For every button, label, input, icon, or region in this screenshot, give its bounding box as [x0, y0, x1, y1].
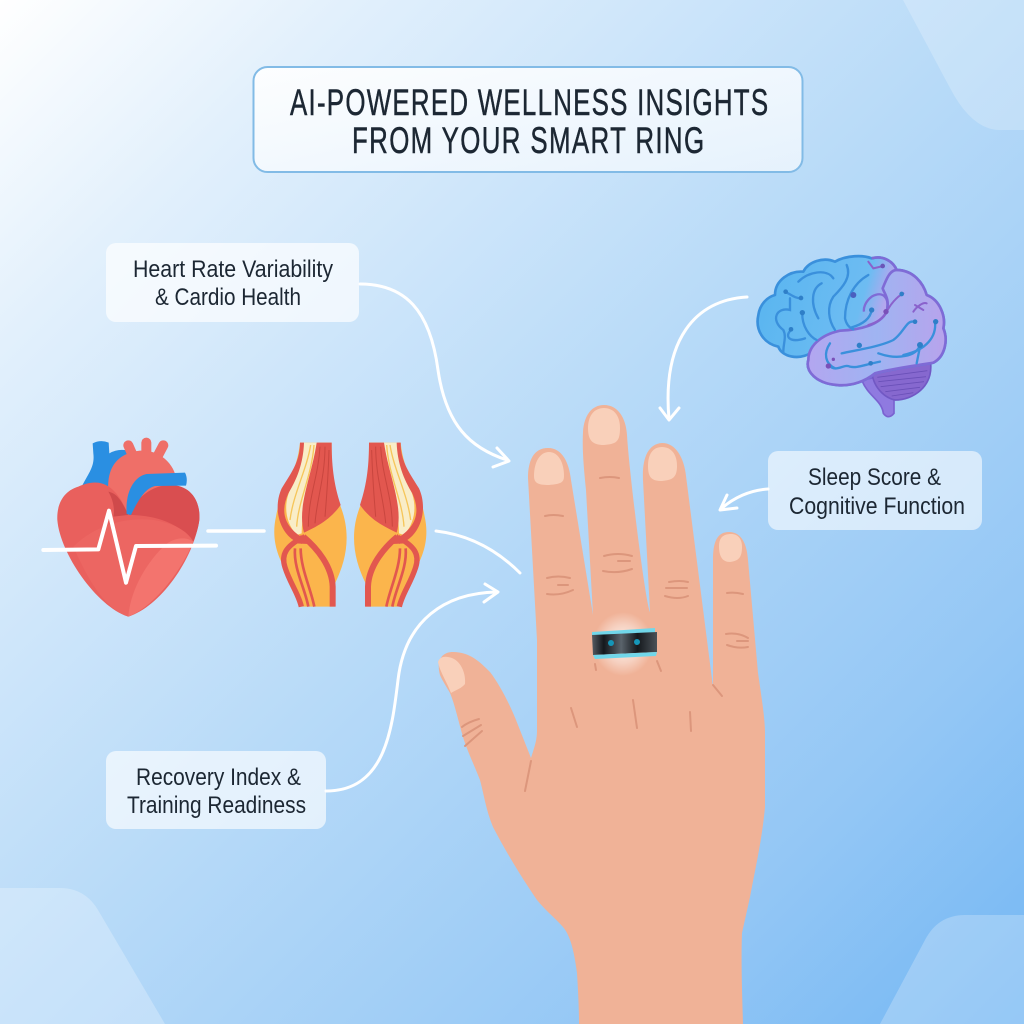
arrow: muscle to hand — [436, 531, 520, 573]
nail: little — [719, 534, 742, 562]
label: heart rate variability: Heart Rate Variability — [133, 256, 333, 283]
label: heart rate variability — [106, 243, 359, 322]
corner shape: top right — [903, 0, 1024, 130]
hand — [438, 405, 765, 1024]
smart ring — [592, 612, 657, 676]
connector: heart to muscle — [208, 529, 264, 533]
brain stem and cerebellum — [862, 373, 897, 417]
arrow: sleep label to hand — [720, 489, 768, 510]
nail: index — [534, 452, 564, 485]
hand silhouette — [439, 405, 765, 1024]
label: sleep score: Cognitive Function — [789, 493, 965, 520]
corner shape: bottom left — [0, 888, 165, 1024]
knuckle creases — [462, 477, 748, 791]
label: recovery index: Recovery Index & — [136, 764, 301, 791]
corner shape: bottom right — [880, 915, 1024, 1024]
cerebrum — [758, 256, 946, 385]
icon: muscles — [274, 443, 426, 607]
title: FROM YOUR SMART RING — [352, 119, 704, 161]
arrow: heart label to hand — [360, 284, 509, 467]
label: recovery index: Training Readiness — [127, 792, 306, 819]
arrow: recovery label to hand — [326, 584, 498, 791]
label: heart rate variability: & Cardio Health — [155, 284, 301, 311]
nail: thumb — [438, 657, 465, 693]
temporal lobe — [808, 270, 946, 385]
label: sleep score: Sleep Score & — [808, 464, 941, 491]
icon: brain — [758, 256, 946, 417]
title — [254, 67, 802, 172]
icon: heart — [43, 441, 216, 617]
left muscle — [274, 443, 347, 607]
label: recovery index — [106, 751, 326, 829]
title: AI-POWERED WELLNESS INSIGHTS — [290, 81, 768, 123]
label: sleep score — [768, 451, 982, 530]
ECG line — [43, 511, 216, 583]
ring glow — [593, 612, 653, 676]
right muscle — [354, 443, 426, 607]
arrow: brain to hand — [660, 297, 747, 420]
nail: middle — [588, 408, 620, 445]
nail: ring — [648, 447, 677, 481]
